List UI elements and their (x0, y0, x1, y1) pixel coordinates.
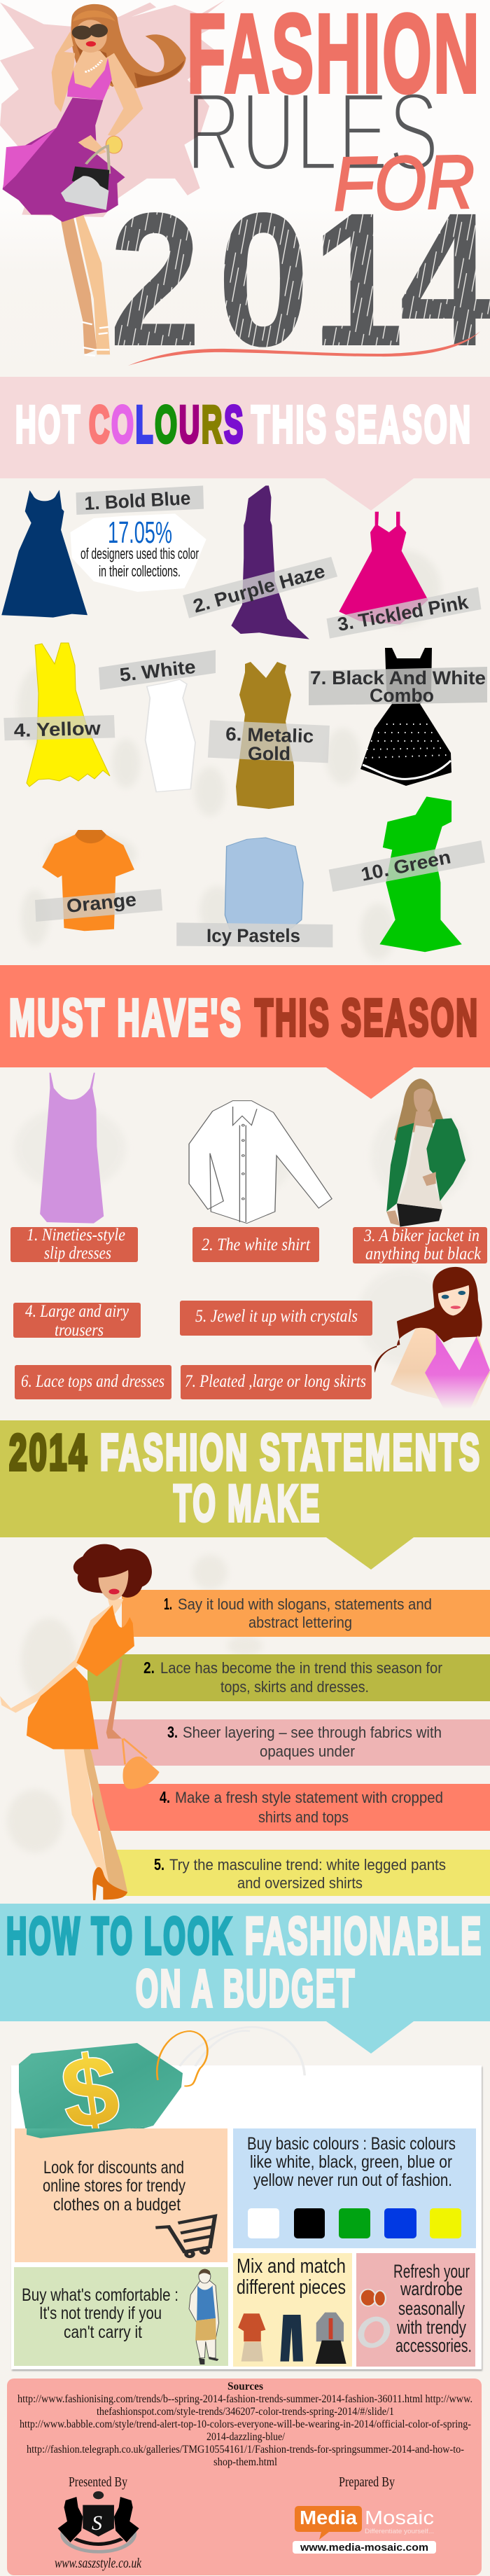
item icy pastels jacket: Icy Pastels (206, 925, 300, 946)
illustration: woman in orange dress (0, 1544, 160, 1900)
callout 4: 4. Large and airy (25, 1302, 130, 1321)
statistic 17.05% (80, 515, 199, 580)
background splatter (14, 1107, 469, 1366)
heading: 2014 (9, 1425, 89, 1481)
dress 6 metalic gold (208, 662, 330, 809)
tip panel: discounts: Look for discounts and (43, 2158, 184, 2177)
dress 10 green (329, 796, 485, 952)
statement 5 (115, 1850, 490, 1896)
price tag icon: $ (55, 2033, 125, 2151)
statement 5: and oversized shirts (237, 1874, 363, 1892)
panel: hot colours this season (0, 377, 490, 960)
statement 2: Lace has become the in trend this season for (160, 1659, 442, 1677)
dress 6 metalic gold: Gold (248, 743, 290, 764)
dress 5 white: 5. White (118, 656, 197, 686)
source links: shop-them.html (214, 2456, 277, 2468)
statistic 17.05%: in their collections. (99, 562, 181, 580)
tip panel: mix and match: different pieces (237, 2276, 346, 2299)
dress 2 purple haze (183, 485, 337, 639)
dress 4 yellow: 4. Yellow (13, 718, 102, 741)
callout 2: 2. The white shirt (202, 1235, 311, 1254)
heading (6, 1906, 483, 2017)
heading: HOT (15, 395, 82, 454)
statement 3 (91, 1719, 490, 1766)
heading: MUST HAVE'S (9, 989, 243, 1046)
colour swatches (248, 2208, 461, 2238)
logo: saszstyle crest: S (92, 2512, 102, 2535)
callout 6: 6. Lace tops and dresses (21, 1372, 164, 1391)
callout 5: 5. Jewel it up with crystals (195, 1307, 358, 1326)
statement 4: 4. (160, 1788, 170, 1806)
title: for: FOR (332, 139, 475, 226)
tip panel: accessories (356, 2253, 475, 2367)
logo: media mosaic: Media (300, 2507, 357, 2528)
statement 2 (88, 1654, 490, 1701)
icon: outfit pieces (238, 2313, 346, 2364)
dress 4 yellow (4, 643, 115, 787)
heading: TO MAKE (174, 1475, 321, 1532)
prepared by (293, 2474, 436, 2554)
illustration: fashion woman in purple dress (3, 4, 186, 356)
tip panel: comfortable: Buy what's comfortable : (22, 2285, 178, 2305)
tip panel: comfortable: can't carry it (64, 2322, 142, 2342)
statistic 17.05%: 17.05% (108, 515, 172, 550)
dress 2 purple haze: 2. Purple Haze (191, 560, 328, 617)
tip panel: mix and match (233, 2253, 352, 2367)
item: white shirt (189, 1101, 332, 1224)
dress 1 bold blue: 1. Bold Blue (84, 487, 191, 514)
illustration: girl with long hair (374, 1267, 490, 1409)
title: 2014: 2014 (109, 174, 490, 387)
red underline swoosh (128, 331, 480, 366)
heading (15, 395, 472, 454)
callout 4: trousers (55, 1321, 104, 1340)
tip panel: basic colours: like white, black, green, blue or (250, 2152, 452, 2172)
dress 10 green: 10. Green (359, 846, 453, 885)
price tag icon (19, 2031, 207, 2151)
background paint splatter (18, 550, 441, 960)
callout 1 (10, 1226, 138, 1263)
item: woman in green biker jacket (386, 1079, 465, 1227)
tip panel: discounts: clothes on a budget (53, 2195, 181, 2215)
callout 2 (192, 1227, 319, 1262)
item: slip dress (40, 1073, 104, 1224)
statement 1: Say it loud with slogans, statements and (178, 1595, 432, 1613)
callout 7 (181, 1365, 372, 1399)
item icy pastels jacket (176, 838, 332, 948)
logo: media mosaic: www.media-mosaic.com (300, 2542, 428, 2554)
callout 5 (180, 1301, 372, 1336)
sources heading: Sources (227, 2381, 263, 2393)
tip panel: mix and match: Mix and match (237, 2255, 346, 2278)
tip panel: accessories: with trendy (396, 2317, 466, 2338)
heading: COLOURS (89, 395, 245, 454)
background splatter (7, 1555, 262, 1853)
source links (18, 2393, 472, 2468)
tip panel: discounts: online stores for trendy (43, 2176, 186, 2196)
tip panel: basic colours (233, 2128, 476, 2248)
dress 7 black and white: 7. Black And White (310, 667, 486, 688)
dress 7 black and white (309, 648, 487, 786)
tip panel: accessories: seasonally (398, 2298, 465, 2319)
prepared by: Prepared By (339, 2474, 395, 2490)
dress 5 white (99, 650, 216, 792)
source links: 2014-dazzling-blue/ (206, 2431, 285, 2443)
statement 2: 2. (144, 1659, 155, 1677)
pink paint splash (0, 0, 225, 217)
panel: hero header (0, 0, 490, 387)
statement 2: tops, skirts and dresses. (220, 1678, 369, 1696)
statement 1: abstract lettering (248, 1614, 352, 1631)
heading: HOW TO LOOK (6, 1906, 234, 1965)
tip panel: basic colours: yellow never run out of fashion. (253, 2170, 452, 2190)
icon: earrings and bangle (357, 2290, 391, 2348)
logo: media mosaic: Mosaic (365, 2507, 434, 2528)
panel: how to look fashionable on a budget (0, 1904, 490, 2369)
statistic 17.05%: of designers used this color (80, 545, 199, 562)
callout 4 (13, 1302, 141, 1340)
statement 3: Sheer layering – see through fabrics with (183, 1724, 442, 1741)
statement 4: shirts and tops (258, 1808, 349, 1826)
callout 1: slip dresses (44, 1244, 111, 1263)
item orange t-shirt (35, 830, 162, 931)
presented by: Presented By (69, 2474, 127, 2490)
illustration: man in blue tank (189, 2269, 218, 2364)
statement 3: opaques under (260, 1743, 355, 1760)
statement 5: 5. (154, 1855, 164, 1874)
panel: 2014 fashion statements to make (0, 1420, 490, 1900)
dress 3 tickled pink (326, 512, 481, 639)
tip panel: discounts (15, 2126, 227, 2262)
statement 1: 1. (164, 1595, 172, 1613)
panel: must have's this season (0, 965, 490, 1409)
shopping bag card (11, 2027, 482, 2369)
header band (0, 965, 490, 1099)
icon: shopping cart (155, 2216, 215, 2257)
bag handles (180, 2027, 304, 2075)
logo: media mosaic: Differentiate yourself... (365, 2528, 434, 2535)
statement 3: 3. (167, 1723, 178, 1741)
heading: THIS (251, 395, 328, 454)
tip panel: comfortable (14, 2267, 228, 2366)
dress 1 bold blue (1, 485, 204, 618)
presented by (55, 2474, 142, 2571)
presented by: www.saszstyle.co.uk (55, 2556, 142, 2571)
source links: thefashionspot.com/style-trends/346207-color-trends-spring-2014/#/slide/1 (97, 2406, 394, 2418)
dress 6 metalic gold: 6. Metalic (225, 723, 314, 747)
item orange t-shirt: Orange (66, 889, 137, 917)
dress 3 tickled pink: 3. Tickled Pink (336, 591, 470, 635)
callout 6 (15, 1365, 172, 1399)
dress 7 black and white: Combo (370, 685, 434, 706)
statement 1 (122, 1590, 490, 1637)
tip panel: comfortable: It's not trendy if you (39, 2304, 162, 2323)
callout 3 (353, 1226, 487, 1263)
header band (0, 1420, 490, 1570)
white splash behind statistic (70, 513, 206, 592)
header band (0, 1904, 490, 2054)
heading (9, 1425, 482, 1532)
statement 4: Make a fresh style statement with cropped (175, 1789, 443, 1806)
panel: sources and credits (7, 2378, 482, 2575)
statement 4 (92, 1784, 490, 1831)
tip panel: accessories: wardrobe (400, 2278, 463, 2299)
header band (0, 377, 490, 511)
callout 1: 1. Nineties-style (27, 1226, 125, 1245)
callout 7: 7. Pleated ,large or long skirts (185, 1372, 366, 1391)
statement 5: Try the masculine trend: white legged pants (169, 1856, 446, 1874)
logo: media mosaic (293, 2506, 436, 2554)
